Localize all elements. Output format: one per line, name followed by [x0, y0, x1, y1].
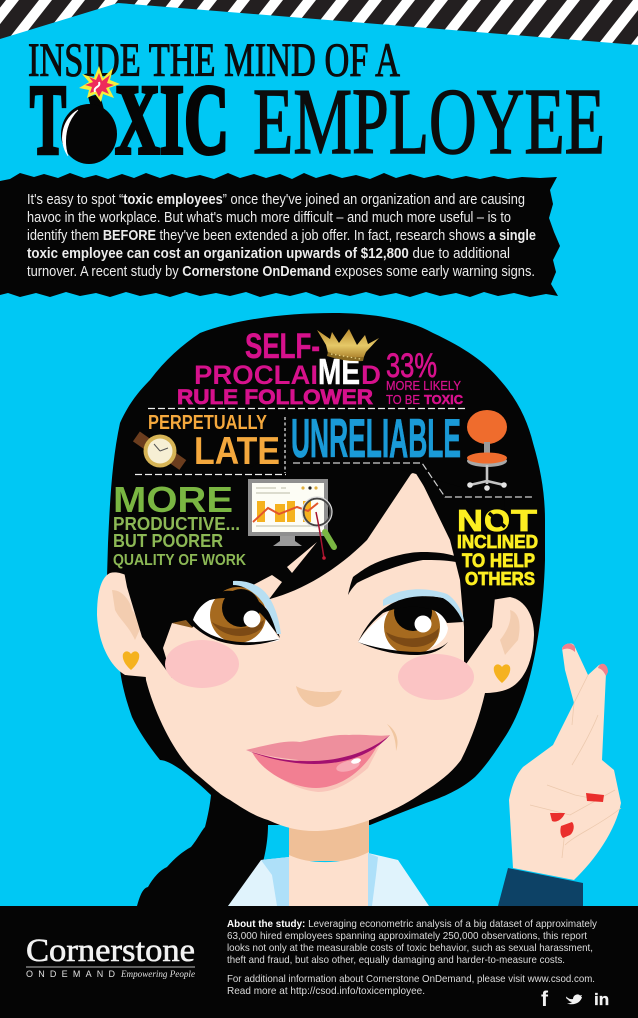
section: self-proclaimed rule follower: SELF-: [245, 327, 320, 366]
intro text: It's easy to spot “toxic employees” once they've joined an organization and are causing: [27, 192, 525, 208]
stat: 33 percent more likely to be toxic: [386, 347, 464, 407]
logo: cornerstone ondemand: ONDEMAND: [26, 969, 116, 979]
stat: 33 percent more likely to be toxic: 33%: [386, 347, 437, 385]
intro banner: [0, 173, 560, 297]
section: more productive but poorer quality of work: [113, 479, 246, 569]
section: not inclined to help others: T: [511, 503, 537, 538]
title: [28, 34, 605, 175]
logo: cornerstone ondemand: Empowering People: [120, 970, 195, 980]
right ear: [484, 597, 534, 693]
section: self-proclaimed rule follower: RULE FOLLOWER: [177, 386, 373, 409]
section: perpetually late: [148, 412, 280, 473]
section: self-proclaimed rule follower: D: [361, 360, 381, 390]
about the study text: looks not only at the measurable costs of toxic behavior, such as sexual harassment,: [227, 942, 593, 954]
hand crossed fingers: [509, 643, 621, 880]
section: self-proclaimed rule follower: [177, 327, 381, 409]
cheek blush left: [165, 640, 239, 688]
cheek blush right: [398, 654, 474, 700]
section: not inclined to help others: [457, 503, 538, 589]
intro text: havoc in the workplace. But what's much more difficult – and much more useful – is to: [27, 210, 511, 226]
section: self-proclaimed rule follower: ME: [318, 351, 360, 392]
icon: crown: [317, 329, 379, 361]
nose: [296, 686, 342, 707]
text: UNRELIABLE: [291, 407, 461, 469]
section: more productive but poorer quality of work: QUALITY OF WORK: [113, 552, 246, 569]
intro text: identify them BEFORE they've been extended a job offer. In fact, research shows a single: [27, 228, 536, 244]
hair back and tail: [107, 313, 545, 906]
icon: monitor with chart and magnifier: [248, 479, 334, 560]
section: not inclined to help others: TO HELP: [462, 551, 535, 572]
title word: toxic: O: [72, 92, 106, 165]
section: not inclined to help others: INCLINED: [457, 532, 538, 552]
hair bangs and side strands: [118, 440, 505, 678]
logo: cornerstone ondemand: Cornerstone: [26, 933, 195, 969]
about the study text: [227, 918, 598, 997]
striped top band: [0, 0, 638, 60]
icon: left earring: [123, 651, 139, 670]
icon: watch: [133, 432, 186, 470]
icon: twitter: [566, 994, 582, 1004]
icon: facebook: f: [541, 988, 549, 1011]
about the study text: For additional information about Cornerstone OnDemand, please visit www.csod.com.: [227, 973, 595, 985]
section: more productive but poorer quality of work: MORE: [113, 479, 233, 520]
stat: 33 percent more likely to be toxic: TOXIC: [424, 392, 464, 407]
section: not inclined to help others: OTHERS: [465, 569, 535, 589]
title word: toxic: T: [30, 64, 66, 175]
intro text: turnover. A recent study by Cornerstone OnDemand exposes some early warning signs.: [27, 264, 535, 280]
icon: office chair: [467, 410, 507, 491]
left ear: [97, 572, 146, 677]
neck: [289, 815, 369, 906]
mouth: [246, 724, 398, 792]
right eye: [358, 589, 464, 655]
title word: toxic: XIC: [115, 64, 229, 175]
intro text: [27, 192, 536, 280]
stat: 33 percent more likely to be toxic: MORE LIKELY: [386, 378, 461, 393]
section: more productive but poorer quality of work: PRODUCTIVE...: [113, 514, 240, 534]
section: not inclined to help others: N: [457, 503, 483, 538]
icon: bomb: [61, 66, 120, 164]
stat: 33 percent more likely to be toxic: TO BE: [386, 392, 420, 407]
icon: red nails: [550, 793, 604, 838]
shirt cuff: [498, 868, 583, 906]
skin wedge of hair parting: [253, 542, 317, 598]
social icons: [541, 988, 609, 1011]
section: not inclined to help others: O: [484, 503, 510, 538]
section: perpetually late: PERPETUALLY: [148, 412, 268, 434]
face: [140, 472, 495, 831]
section: self-proclaimed rule follower: PROCLAI: [194, 360, 318, 390]
shirt collar: [228, 853, 429, 906]
title line: inside the mind of a: INSIDE THE MIND OF A: [28, 34, 400, 87]
section: perpetually late: LATE: [194, 430, 280, 473]
title word: toxic: [30, 64, 229, 175]
about the study text: 63,000 hired employees spanning approximately 250,000 observations, this report: [227, 930, 587, 942]
about the study text: About the study: Leveraging econometric analysis of a big dataset of approximately: [227, 918, 598, 930]
about the study text: Read more at http://csod.info/toxicemployee.: [227, 985, 425, 997]
footer bar: [0, 906, 638, 1018]
about the study text: theft and fraud, but also other, equally damaging and harder-to-measure costs.: [227, 954, 565, 966]
dashed dividers: [135, 408, 533, 497]
section: more productive but poorer quality of work: BUT POORER: [113, 531, 223, 551]
icon: linkedin: in: [594, 990, 609, 1009]
right eyebrow: [348, 552, 456, 595]
left eye: [172, 581, 281, 645]
icon: right earring: [494, 664, 510, 683]
intro text: toxic employee can cost an organization upwards of $12,800 due to additional: [27, 246, 510, 262]
